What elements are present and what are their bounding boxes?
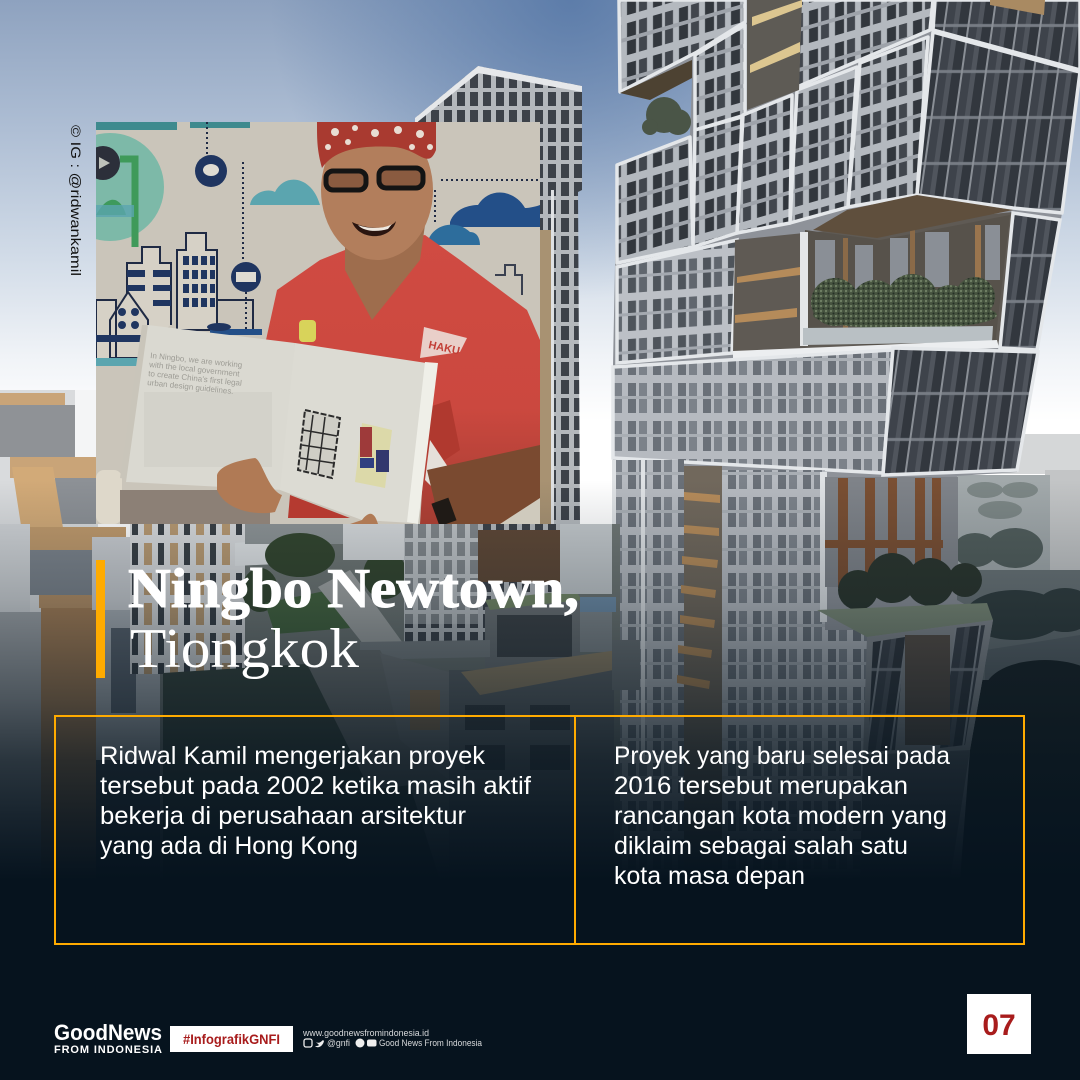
orange accent bar <box>96 560 105 678</box>
lower tower <box>612 460 958 880</box>
terrace soffit <box>813 195 1013 238</box>
left text block: bekerja di perusahaan arsitektur <box>100 802 466 830</box>
page number badge <box>967 994 1031 1054</box>
website and social handles: www.goodnewsfromindonesia.id <box>302 1028 429 1039</box>
distant buildings right <box>950 434 1080 900</box>
tower silhouette <box>612 0 1080 880</box>
batik headband <box>317 122 436 168</box>
hashtag badge: #InfografikGNFI <box>183 1032 280 1047</box>
GoodNews logo <box>54 1020 162 1056</box>
terrace trees <box>811 274 997 329</box>
left foreground building <box>0 390 236 920</box>
open book: In Ningbo, we are working <box>150 351 243 370</box>
tree on notch <box>642 97 691 135</box>
face and neck <box>345 225 425 320</box>
title: Tiongkok <box>130 618 359 680</box>
right text block: rancangan kota modern yang <box>614 802 947 830</box>
mid-left tower cells <box>617 240 737 363</box>
brown forearm <box>427 445 540 524</box>
social icons <box>304 1038 376 1048</box>
open book: to create China's first legal <box>148 369 242 388</box>
smile <box>352 221 396 236</box>
right text block: 2016 tersebut merupakan <box>614 772 908 800</box>
GoodNews logo: FROM INDONESIA <box>54 1044 162 1056</box>
right text block: Proyek yang baru selesai pada <box>614 742 950 770</box>
title: Ningbo Newtown, <box>128 558 579 620</box>
left text block: Ridwal Kamil mengerjakan proyek <box>100 742 485 770</box>
page number badge: 07 <box>982 1009 1016 1042</box>
lower wide block <box>613 348 1038 475</box>
open book: urban design guidelines. <box>147 378 234 396</box>
terrace railing and deck <box>733 326 999 359</box>
upper soffit <box>620 60 692 100</box>
website and social handles: @gnfi <box>327 1038 350 1049</box>
right text block <box>614 742 950 890</box>
hashtag badge <box>170 1026 293 1052</box>
plan maps <box>298 410 392 488</box>
terrace recess <box>733 212 1013 353</box>
title <box>128 558 579 680</box>
lower terrace trees <box>838 553 982 610</box>
bottom dark gradient overlay <box>0 480 1080 1080</box>
left text block <box>100 742 531 860</box>
wall mural <box>56 122 540 366</box>
glasses <box>326 168 423 190</box>
right dark column <box>1000 213 1060 350</box>
left text block: yang ada di Hong Kong <box>100 832 358 860</box>
text panel frame <box>55 716 1024 944</box>
haku logo on shirt <box>420 327 467 358</box>
right text block: diklaim sebagai salah satu <box>614 832 908 860</box>
main tower <box>612 0 1080 880</box>
balcony strip top <box>747 0 1045 110</box>
lower terrace block <box>817 603 993 880</box>
background tower behind photo <box>415 66 582 524</box>
red polo shirt <box>266 235 540 524</box>
open book: with the local government <box>148 360 241 379</box>
upper tower blocks <box>617 0 1080 263</box>
central courtyard scene <box>130 524 640 904</box>
right text block: kota masa depan <box>614 862 805 890</box>
left text block: tersebut pada 2002 ketika masih aktif <box>100 772 531 800</box>
photo credit: © IG : @ridwankamil <box>68 125 83 276</box>
open book <box>120 325 438 524</box>
website and social handles <box>302 1028 483 1049</box>
hand holding book <box>217 458 378 524</box>
GoodNews logo: GoodNews <box>54 1020 162 1045</box>
website and social handles: Good News From Indonesia <box>379 1038 483 1049</box>
haku logo on shirt: HAKU <box>427 339 461 358</box>
photo of Ridwan Kamil with book <box>56 120 540 526</box>
